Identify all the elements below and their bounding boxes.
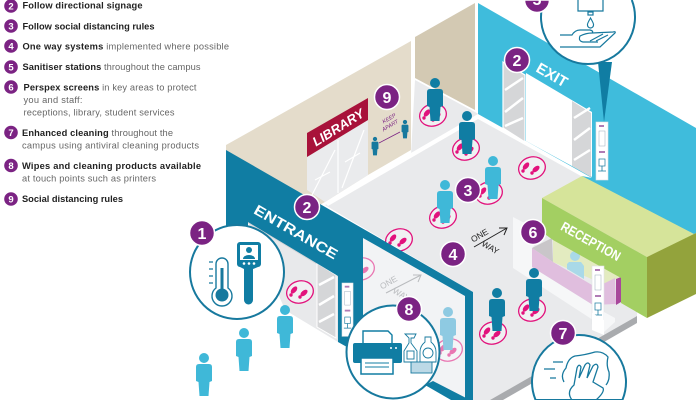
icon: hand wiping <box>544 352 609 400</box>
footprint marker entrance <box>284 278 316 306</box>
exit door left <box>503 62 525 142</box>
legend item 5: 5 <box>8 62 14 74</box>
back wall <box>415 3 475 110</box>
white floor line <box>325 114 592 206</box>
legend item 8: Wipes and cleaning products available <box>22 161 201 171</box>
people on floor dark <box>427 78 542 331</box>
entrance interior <box>248 222 338 342</box>
exit label: EXIT <box>533 60 570 91</box>
callout 5 pointer <box>598 62 612 122</box>
badge 8 <box>396 296 422 322</box>
legend item 8 <box>4 159 201 183</box>
keep apart sign <box>372 113 408 155</box>
legend item 5 <box>4 60 201 74</box>
badge 3: 3 <box>464 183 473 200</box>
one way reflection <box>378 273 421 303</box>
entrance label: ENTRANCE <box>251 202 341 263</box>
badge 7 <box>550 320 576 346</box>
side face <box>647 233 696 318</box>
exit sanitiser stand <box>596 122 608 180</box>
badge 8: 8 <box>405 302 414 319</box>
counter end <box>616 277 621 305</box>
library sign <box>307 98 368 157</box>
legend item 5: Sanitiser stations throughout the campus <box>22 62 201 72</box>
legend item 4 <box>4 39 229 53</box>
badge 6: 6 <box>529 225 538 242</box>
badge 9 <box>374 84 400 110</box>
legend item 7: Enhanced cleaning throughout the <box>22 128 173 138</box>
badge 1: 1 <box>198 226 207 243</box>
one way reflection: ONE <box>378 273 399 291</box>
entrance wall <box>226 150 473 400</box>
legend item 2: 2 <box>8 2 14 12</box>
badge 2 entrance <box>294 194 320 220</box>
legend item 6: you and staff: <box>24 95 82 105</box>
badge 1 <box>190 220 214 246</box>
legend item 3 <box>4 19 155 33</box>
legend item 6 <box>4 80 197 117</box>
exit door right <box>572 101 591 177</box>
badge 9: 9 <box>383 90 392 107</box>
receptionist <box>567 251 584 279</box>
inner wall <box>553 238 620 285</box>
reception label: RECEPTION <box>558 219 623 264</box>
exit opening <box>526 73 592 177</box>
legend item 6: 6 <box>8 82 14 94</box>
legend item 7: campus using antiviral cleaning products <box>22 140 199 150</box>
legend item 4: 4 <box>8 42 14 52</box>
legend list <box>4 0 229 206</box>
person behind glass <box>440 307 456 350</box>
front fascia <box>542 198 647 318</box>
roof <box>542 176 696 257</box>
badge 2 exit <box>504 48 530 72</box>
one way floor marking: WAY <box>480 238 501 256</box>
people on floor light <box>437 156 501 223</box>
badge 3 <box>456 178 480 202</box>
keep apart sign: KEEP <box>382 113 398 125</box>
entrance door <box>317 263 336 338</box>
badge 5 <box>524 0 550 12</box>
legend item 9: Social distancing rules <box>22 194 123 204</box>
legend item 9: 9 <box>8 194 14 206</box>
lower beam <box>425 381 470 400</box>
legend item 8: 8 <box>8 161 14 172</box>
icon: cleaning products <box>404 334 436 373</box>
exit wall <box>478 3 696 251</box>
badge 4: 4 <box>449 247 458 264</box>
legend item 4: One way systems implemented where possible <box>22 41 229 51</box>
one way floor marking: ONE <box>469 226 490 244</box>
perspex screen <box>513 217 593 320</box>
legend item 6: receptions, library, student services <box>24 107 175 117</box>
badge 6 <box>520 220 546 244</box>
icon: thermal scanner <box>237 242 261 304</box>
badge 4 <box>440 242 466 266</box>
legend item 8: at touch points such as printers <box>22 173 156 183</box>
callout 7: cleaning <box>532 335 626 400</box>
legend item 2: Follow directional signage <box>22 0 142 10</box>
icon: dispenser and hand <box>560 0 615 47</box>
callout 1: temperature check <box>190 225 284 319</box>
reception <box>513 176 696 335</box>
footprint behind glass <box>345 255 377 283</box>
entrance sanitiser stand <box>342 283 353 336</box>
icon: thermometer <box>209 258 232 306</box>
legend item 3: Follow social distancing rules <box>22 21 154 31</box>
badge 7: 7 <box>559 326 568 343</box>
legend item 9 <box>4 192 123 206</box>
legend item 7: 7 <box>8 128 14 139</box>
people queue outside <box>196 305 293 396</box>
badge 2 exit: 2 <box>513 53 522 70</box>
floor edge <box>490 316 637 400</box>
reception sanitiser stand <box>592 266 604 324</box>
library wall <box>226 41 411 212</box>
library sign: LIBRARY <box>310 105 368 149</box>
keep apart sign: APART <box>380 119 400 134</box>
counter <box>532 248 616 305</box>
callout 8: printers and wipes <box>346 306 440 398</box>
one way floor marking <box>469 226 507 256</box>
entrance glass panel <box>345 238 465 400</box>
one way reflection: WAY <box>391 285 412 303</box>
icon: printer <box>353 331 402 374</box>
badge 2 entrance: 2 <box>303 200 312 217</box>
legend item 7 <box>4 126 199 150</box>
grey counter side <box>532 238 553 262</box>
legend item 3: 3 <box>8 22 14 32</box>
library doors <box>307 120 368 202</box>
legend item 2 <box>4 0 143 13</box>
callout 5: sanitiser <box>541 0 635 64</box>
floor markers <box>383 101 548 347</box>
floor <box>325 80 640 400</box>
legend item 6: Perspex screens in key areas to protect <box>24 82 197 92</box>
